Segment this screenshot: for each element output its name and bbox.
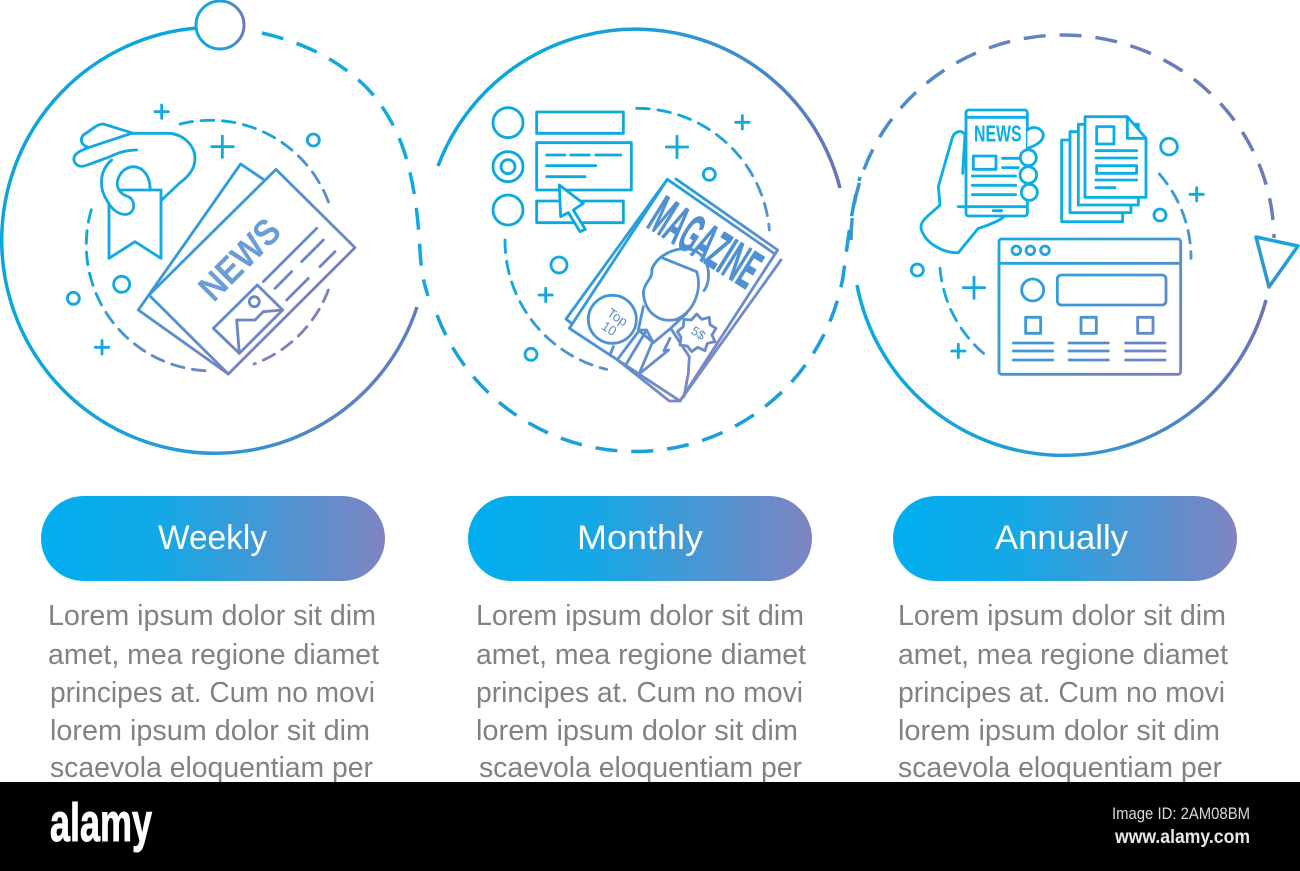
pill: Weekly: Weekly: [158, 519, 267, 557]
ring: annually step: [851, 35, 1274, 455]
footer bar: [0, 782, 1300, 871]
magazine: [566, 179, 781, 401]
text block: annually: principes at. Cum no movi: [898, 677, 1225, 709]
top 10 badge: [588, 295, 636, 343]
icon: phone, documents and web page: [911, 110, 1203, 374]
text block: monthly: scaevola eloquentiam per: [479, 752, 802, 784]
phone in hand: [921, 110, 1043, 253]
pill: Monthly: Monthly: [577, 519, 703, 557]
icon: form menu and magazine: [493, 108, 781, 401]
text block: weekly: [48, 600, 379, 784]
option list: [493, 108, 631, 225]
text block: weekly: amet, mea regione diamet: [48, 639, 379, 671]
text block: annually: [898, 600, 1228, 784]
text block: weekly: principes at. Cum no movi: [50, 677, 375, 709]
sparkles: [911, 138, 1203, 358]
text block: weekly: Lorem ipsum dolor sit dim: [48, 600, 376, 632]
arrowhead: [1256, 237, 1298, 287]
text block: annually: scaevola eloquentiam per: [898, 752, 1222, 784]
ring: monthly step: [437, 29, 860, 452]
start marker circle: [196, 1, 244, 49]
text block: monthly: Lorem ipsum dolor sit dim: [476, 600, 804, 632]
sparkles: [67, 105, 319, 354]
text block: monthly: [476, 600, 806, 784]
pill: Annually: Annually: [995, 519, 1128, 557]
text block: weekly: scaevola eloquentiam per: [50, 752, 373, 784]
inner dashed ring: [505, 108, 769, 369]
newspaper: [138, 164, 355, 374]
person: [643, 249, 709, 320]
inner dashed ring: [86, 120, 331, 371]
badge label Top 10: Top: [604, 305, 631, 329]
pill: Weekly: [41, 496, 385, 581]
pill: Monthly: [468, 496, 812, 581]
text block: weekly: lorem ipsum dolor sit dim: [50, 715, 370, 747]
inner dashed ring: [940, 174, 1191, 356]
price badge: [677, 314, 716, 352]
ring: weekly step: [2, 28, 428, 453]
text block: annually: amet, mea regione diamet: [898, 639, 1228, 671]
text block: monthly: principes at. Cum no movi: [476, 677, 803, 709]
icon: hand with bookmark and newspaper: [67, 105, 355, 374]
website: www.alamy.com: [1114, 827, 1250, 848]
badge label Top 10: [599, 305, 631, 339]
image id: Image ID: 2AM08BM: [1112, 804, 1250, 823]
icon: form menu and magazine: MAGAZINE: [639, 185, 772, 300]
text block: monthly: lorem ipsum dolor sit dim: [476, 715, 798, 747]
document stack: [1062, 117, 1146, 222]
browser window: [999, 239, 1181, 374]
sparkles: [525, 116, 749, 360]
pill: Annually: [893, 496, 1237, 581]
text block: monthly: amet, mea regione diamet: [476, 639, 806, 671]
badge label Top 10: 10: [599, 318, 619, 339]
hand and bookmark: [74, 124, 195, 258]
footer logo: alamy: [50, 793, 152, 853]
cursor: [559, 185, 585, 232]
text block: annually: Lorem ipsum dolor sit dim: [898, 600, 1226, 632]
badge label price: 5$: [688, 324, 708, 343]
phone headline NEWS: NEWS: [974, 121, 1022, 147]
text block: annually: lorem ipsum dolor sit dim: [898, 715, 1220, 747]
headline NEWS: NEWS: [190, 210, 289, 309]
